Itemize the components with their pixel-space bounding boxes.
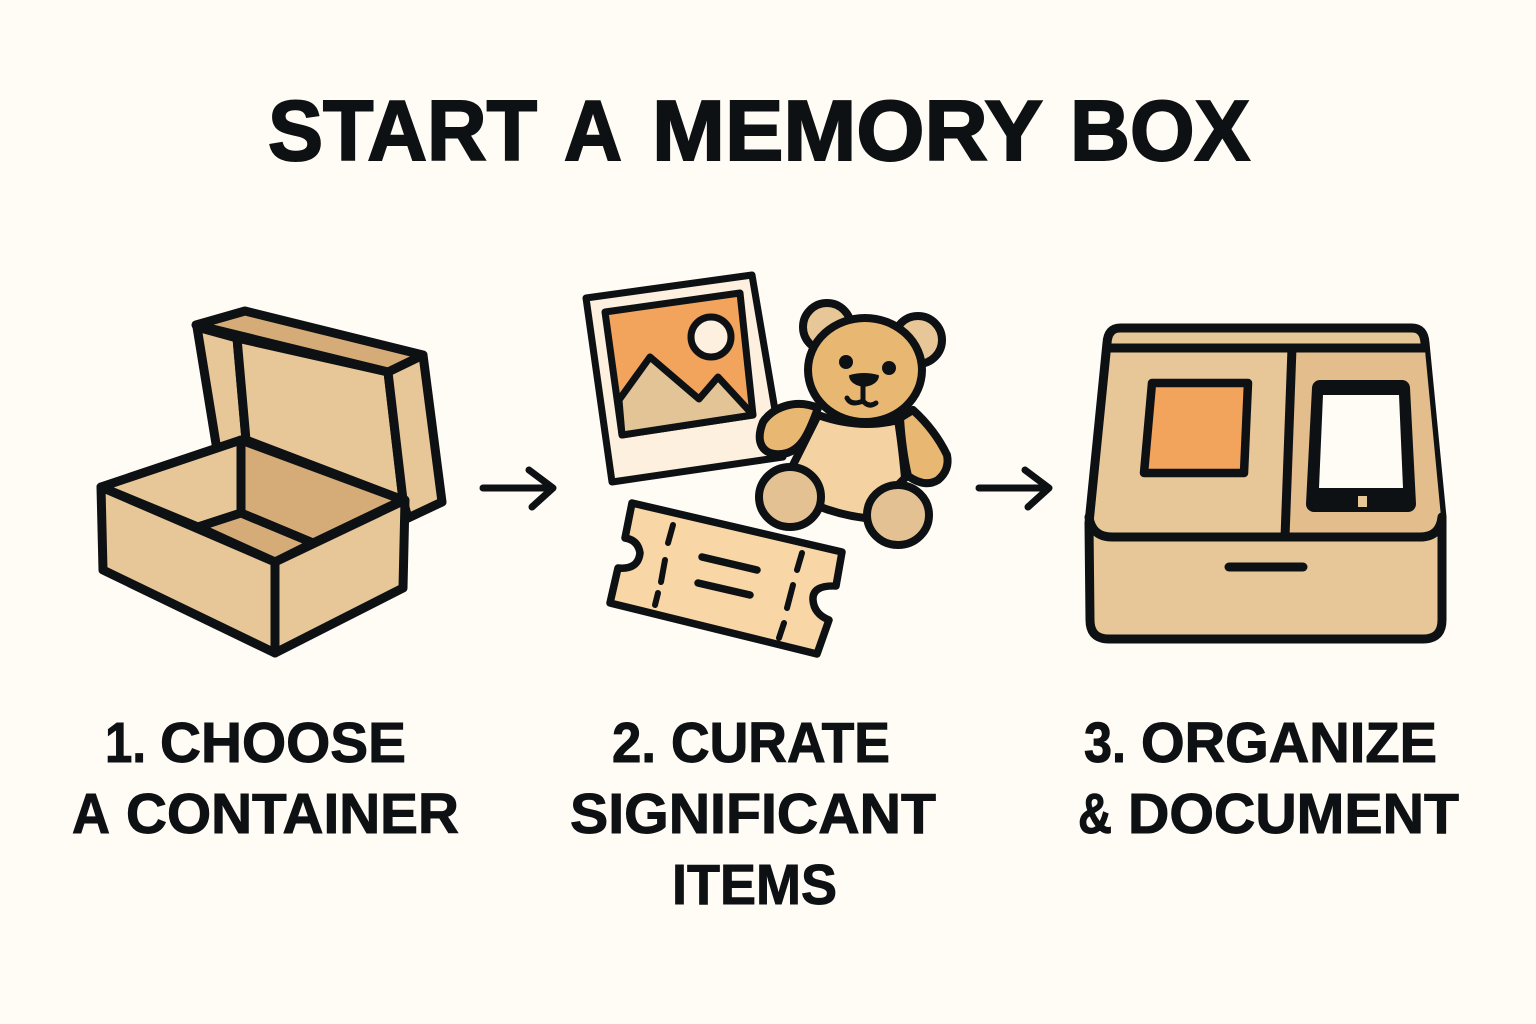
step 2 label: SIGNIFICANT <box>570 782 936 846</box>
icon: open cardboard box <box>101 311 442 653</box>
box lid <box>196 311 442 518</box>
step 2 label: 2. <box>612 711 656 775</box>
arrow: step 1 to step 2 <box>483 470 553 507</box>
arrow: step 2 to step 3 <box>979 470 1049 507</box>
step 3 label: & <box>1078 782 1112 846</box>
step 2 label: ITEMS <box>672 853 837 917</box>
step 1 label: A <box>72 782 110 846</box>
step 1 label: 1. <box>105 711 146 775</box>
icon: teddy bear <box>759 303 948 545</box>
step 2 label <box>570 711 936 917</box>
icon: organized memory box <box>1089 328 1442 639</box>
step 2 label: CURATE <box>671 711 890 775</box>
step 3 label: 3. <box>1084 711 1126 775</box>
tablet <box>1314 388 1408 507</box>
step 3 label <box>1078 711 1459 846</box>
step 3 label: ORGANIZE <box>1141 711 1437 775</box>
box base <box>101 440 405 653</box>
step 3 label: DOCUMENT <box>1128 782 1459 846</box>
step 1 label: CONTAINER <box>126 782 459 846</box>
title: A <box>564 84 622 179</box>
step 1 label <box>72 711 459 846</box>
icon: polaroid photo <box>586 275 783 482</box>
title: BOX <box>1070 84 1250 179</box>
step 1 label: CHOOSE <box>160 711 406 775</box>
orange photo card <box>1144 383 1248 473</box>
title: START <box>268 84 537 179</box>
title <box>268 84 1250 179</box>
icon: ticket <box>610 503 842 654</box>
title: MEMORY <box>652 84 1043 179</box>
